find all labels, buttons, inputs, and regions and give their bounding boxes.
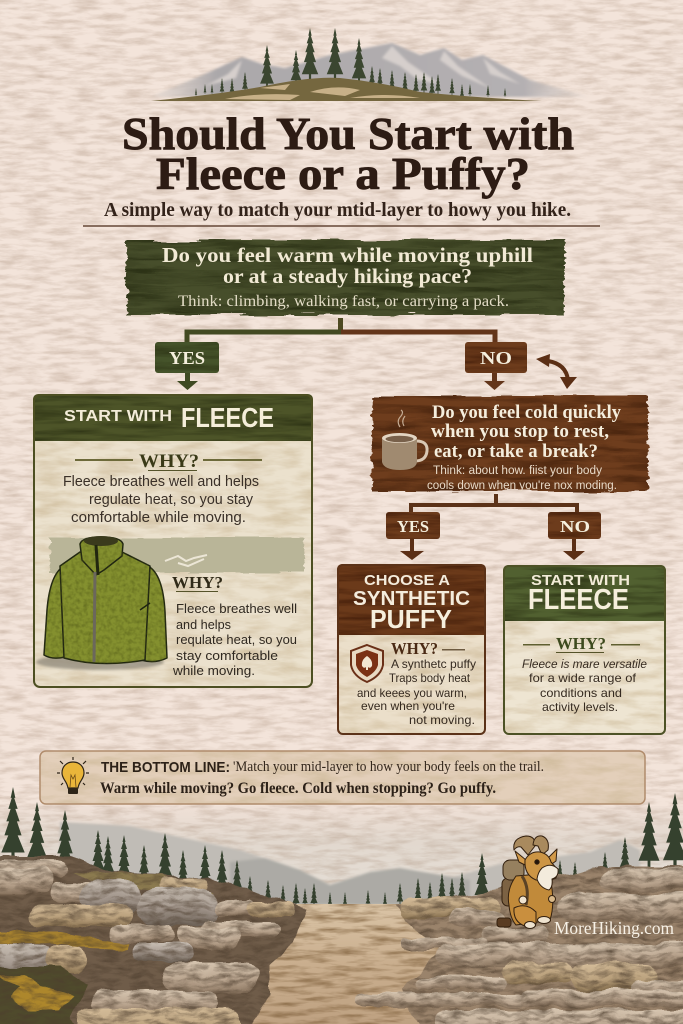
landscape scene [0, 787, 683, 1024]
flow connector: second question [411, 494, 577, 512]
panel header: CHOOSE A [364, 572, 450, 589]
why text: Fleece is mare versatile [522, 657, 647, 671]
squiggle [165, 555, 207, 566]
brush band [50, 538, 304, 573]
panel: start with fleece [33, 394, 313, 687]
why text [63, 474, 259, 526]
question banner: warm while moving [127, 240, 565, 315]
arrow: second no [563, 539, 585, 560]
title: Fleece or a Puffy? [156, 148, 530, 199]
goat ears [515, 849, 557, 866]
question banner: warm while moving: or at a steady hiking pace? [223, 264, 472, 288]
subtitle: A simple way to match your mtid-layer to howy you hike. [104, 199, 571, 221]
question banner: cold when stopping: Do you feel cold quickly [432, 402, 621, 423]
why heading [391, 639, 465, 658]
bottom line callout: Warm while moving? Go fleece. Cold when stopping? Go puffy. [100, 780, 496, 797]
panel header [33, 394, 313, 441]
why text: Traps body heat [389, 671, 471, 685]
why text: conditions and [540, 686, 622, 700]
title: Should You Start with [122, 108, 574, 159]
right rocks [357, 866, 683, 1024]
no tag: NO [480, 348, 512, 368]
icon: light bulb [57, 757, 89, 794]
panel header [503, 565, 666, 621]
boot [497, 918, 511, 927]
question banner: cold when stopping: when you stop to rest, [431, 421, 609, 442]
no tag [465, 342, 527, 373]
question banner: warm while moving: Think: climbing, walking fast, or carrying a pack. [178, 293, 509, 310]
panel: start with fleece, right [503, 565, 666, 734]
second why heading: WHY? [172, 573, 223, 592]
yes tag: second: YES [397, 517, 429, 536]
icon: shield [351, 645, 383, 682]
why text: not moving. [409, 713, 475, 727]
distant mountains [60, 822, 640, 905]
website credit: MoreHiking.com [554, 918, 674, 938]
why text: comfortable while moving. [71, 510, 246, 526]
sky haze [0, 806, 683, 906]
panel header: FLEECE [528, 584, 629, 616]
panel header: START WITH [531, 572, 630, 589]
question banner: warm while moving: Do you feel warm while moving uphill [162, 243, 533, 267]
yes tag: YES [169, 348, 205, 368]
goat muzzle and beard [537, 865, 558, 890]
why text: Fleece breathes well and helps [63, 474, 259, 490]
why heading: WHY? [556, 634, 606, 653]
second why text: while moving. [172, 663, 255, 678]
question banner: cold when stopping [372, 396, 648, 492]
why text: regulate heat, so you stay [89, 492, 254, 508]
why text: for a wide range of [529, 671, 637, 685]
second why text: stay comfortable [176, 648, 278, 663]
curved arrow [536, 354, 577, 389]
left rocks [0, 856, 305, 1024]
panel header: START WITH [64, 408, 172, 425]
why text: even when you're [361, 699, 455, 713]
no tag: second [548, 512, 601, 539]
second why text: requlate heat, so you [176, 632, 297, 647]
panel header [337, 564, 486, 635]
why heading: WHY? [139, 451, 199, 472]
why text [522, 657, 647, 714]
arrow: yes down [177, 373, 198, 390]
goat legs [514, 896, 556, 928]
bottom line callout: THE BOTTOM LINE: [101, 759, 230, 776]
question banner: cold when stopping: eat, or take a break? [434, 441, 598, 462]
icon: fleece jacket [36, 536, 167, 670]
yes tag [155, 342, 219, 373]
flow connector: first question [187, 318, 495, 342]
yes tag: second [386, 512, 440, 539]
icon: coffee mug [382, 410, 427, 470]
why heading [523, 634, 640, 653]
panel header: FLEECE [181, 402, 274, 433]
no tag: second: NO [560, 517, 590, 536]
question banner: cold when stopping: cools down when you're nox moding. [427, 480, 617, 492]
conifer trees [1, 787, 683, 908]
panel header: PUFFY [370, 604, 452, 634]
goat mascot [497, 836, 558, 928]
bottom line callout [40, 751, 645, 804]
mountain and trees illustration [150, 28, 590, 101]
second why text: and helps [176, 617, 231, 632]
question banner: cold when stopping: Think: about how. fiist your body [433, 465, 602, 477]
goat body [508, 874, 553, 925]
panel header: SYNTHETIC [353, 588, 470, 610]
why text: A synthetc puffy [391, 657, 476, 671]
goat head [525, 852, 558, 881]
backpack [502, 860, 524, 906]
title [122, 108, 574, 199]
second why text [172, 601, 297, 678]
dirt trail [0, 904, 683, 1024]
why text [357, 657, 476, 727]
why heading: WHY? [391, 639, 438, 658]
goat horns [514, 836, 548, 855]
autumn shrubs [0, 932, 127, 1024]
why text: activity levels. [542, 700, 618, 714]
bottom line callout: 'Match your mid-layer to how your body feels on the trail. [233, 759, 544, 775]
panel: synthetic puffy [337, 564, 486, 734]
arrow: second yes [400, 539, 424, 560]
arrow: no down [484, 373, 505, 390]
why text: and keees you warm, [357, 686, 467, 700]
second why text: Fleece breathes well [176, 601, 297, 616]
goat pack strap [522, 876, 527, 905]
